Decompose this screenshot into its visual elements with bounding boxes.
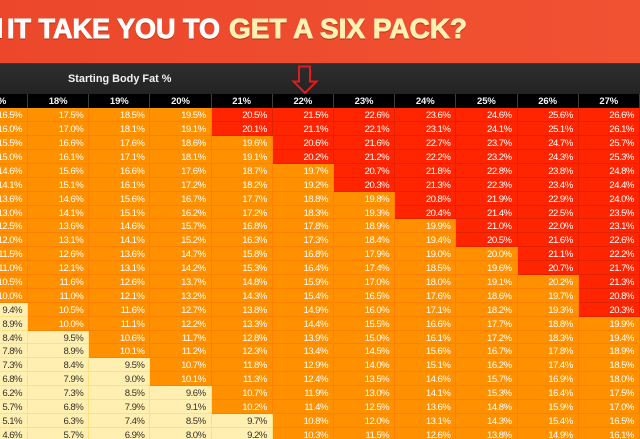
row 21: 6.2%	[2, 388, 22, 399]
row 23: 14.3%	[487, 416, 512, 427]
row 23: 12.0%	[365, 416, 389, 427]
row 8: 21.4%	[487, 208, 512, 219]
row 16: 13.3%	[242, 319, 267, 330]
row 1: 19.5%	[181, 110, 206, 121]
row 23: 9.7%	[247, 416, 267, 427]
row 20: 11.3%	[243, 374, 267, 385]
row 18: 7.8%	[2, 346, 22, 357]
row 4: 19.1%	[242, 152, 267, 163]
row 4: 18.1%	[181, 152, 206, 163]
row 14: 16.5%	[365, 291, 389, 302]
row 19: 10.7%	[181, 360, 206, 371]
row 13: 13.7%	[181, 277, 206, 288]
row 13: 11.6%	[59, 277, 83, 288]
row 2	[0, 122, 640, 136]
row 3: 21.6%	[365, 138, 389, 149]
row 22: 14.8%	[487, 402, 512, 413]
row 15: 19.3%	[548, 305, 573, 316]
row 19: 16.2%	[487, 360, 512, 371]
row 17: 18.3%	[548, 333, 573, 344]
row 7: 16.7%	[181, 194, 206, 205]
row 19: 14.0%	[365, 360, 389, 371]
row 14: 15.4%	[303, 291, 328, 302]
row 17: 9.5%	[64, 333, 83, 344]
row 12: 17.4%	[365, 263, 389, 274]
row 12: 12.1%	[59, 263, 83, 274]
row 1: 25.6%	[548, 110, 573, 121]
row 6: 22.3%	[487, 180, 512, 191]
row 20	[0, 372, 640, 386]
row 17: 12.8%	[242, 333, 267, 344]
row 21: 9.6%	[186, 388, 206, 399]
row 23	[0, 414, 640, 428]
row 10: 19.4%	[426, 235, 450, 246]
row 12: 20.7%	[548, 263, 573, 274]
row 6: 17.2%	[181, 180, 206, 191]
row 1: 26.6%	[609, 110, 634, 121]
row 11: 22.2%	[609, 249, 634, 260]
row 7: 18.8%	[303, 194, 328, 205]
title banner: IT TAKE YOU TO	[7, 13, 220, 44]
row 7: 15.6%	[120, 194, 144, 205]
row 11: 16.8%	[303, 249, 328, 260]
row 18: 14.5%	[365, 346, 389, 357]
row 14: 20.8%	[609, 291, 634, 302]
row 8: 18.3%	[303, 208, 328, 219]
row 6: 23.4%	[548, 180, 573, 191]
row 22: 13.6%	[426, 402, 450, 413]
dark axis band	[0, 63, 640, 94]
row 17: 15.0%	[365, 333, 389, 344]
title banner: GET A SIX PACK?	[229, 13, 467, 44]
row 9: 23.1%	[609, 221, 634, 232]
row 12: 14.2%	[181, 263, 206, 274]
row 8: 19.3%	[365, 208, 389, 219]
row 2: 17.0%	[59, 124, 83, 135]
row 12: 13.1%	[120, 263, 144, 274]
row 8: 14.1%	[59, 208, 83, 219]
row 5	[0, 164, 640, 178]
column headers: 19%	[110, 96, 129, 107]
row 23: 8.5%	[186, 416, 206, 427]
row 18: 11.2%	[182, 346, 206, 357]
row 21: 16.4%	[548, 388, 573, 399]
row 11: 15.8%	[242, 249, 267, 260]
row 18: 18.9%	[609, 346, 634, 357]
row 8	[0, 206, 640, 219]
row 22: 17.0%	[609, 402, 634, 413]
row 17: 16.1%	[426, 333, 450, 344]
row 7: 14.6%	[59, 194, 83, 205]
row 22	[0, 400, 640, 414]
row 12: 18.5%	[426, 263, 450, 274]
row 13: 12.6%	[120, 277, 144, 288]
title banner	[0, 0, 640, 63]
row 17	[0, 331, 640, 344]
row 2: 18.1%	[120, 124, 144, 135]
row 6: 18.2%	[242, 180, 267, 191]
row 20: 9.0%	[125, 374, 144, 385]
row 22: 7.9%	[125, 402, 144, 413]
row 13	[0, 275, 640, 289]
row 9: 17.8%	[303, 221, 328, 232]
row 19	[0, 358, 640, 372]
column headers: 21%	[232, 96, 251, 107]
row 21: 14.1%	[426, 388, 450, 399]
row 21	[0, 386, 640, 400]
row 8: 23.5%	[609, 208, 634, 219]
row 17: 11.7%	[182, 333, 206, 344]
row 13: 17.0%	[365, 277, 389, 288]
row 2: 26.1%	[609, 124, 634, 135]
row 19: 17.4%	[548, 360, 573, 371]
row 4: 16.1%	[59, 152, 83, 163]
row 7: 24.0%	[609, 194, 634, 205]
row 6: 15.1%	[59, 180, 83, 191]
row 7: 20.8%	[426, 194, 450, 205]
row 18: 16.7%	[487, 346, 512, 357]
row 12: 19.6%	[487, 263, 512, 274]
row 3: 22.7%	[426, 138, 450, 149]
row 1: 18.5%	[120, 110, 144, 121]
row 16: 16.6%	[426, 319, 450, 330]
row 20: 18.0%	[609, 374, 634, 385]
row 15: 20.3%	[609, 305, 634, 316]
row 10: 13.1%	[59, 235, 83, 246]
row 20: 13.5%	[365, 374, 389, 385]
row 13: 19.1%	[487, 277, 512, 288]
row 14: 17.6%	[426, 291, 450, 302]
column headers: 26%	[538, 96, 557, 107]
row 14: 13.2%	[181, 291, 206, 302]
row 1	[0, 108, 640, 122]
row 19: 12.9%	[303, 360, 328, 371]
row 5: 24.8%	[609, 166, 634, 177]
row 17: 8.4%	[2, 333, 22, 344]
row 4	[0, 150, 640, 164]
row 20: 15.7%	[487, 374, 512, 385]
row 21: 8.5%	[125, 388, 144, 399]
row 3: 23.7%	[487, 138, 512, 149]
row 12: 15.3%	[242, 263, 267, 274]
row 21: 17.5%	[609, 388, 634, 399]
row 1: 22.6%	[365, 110, 389, 121]
row 2: 21.1%	[303, 124, 328, 135]
row 8: 16.2%	[181, 208, 206, 219]
row 18: 8.9%	[64, 346, 83, 357]
row 16: 18.8%	[548, 319, 573, 330]
row 14: 12.1%	[120, 291, 144, 302]
row 9: 18.9%	[365, 221, 389, 232]
row 21: 15.3%	[487, 388, 512, 399]
row 11: 12.6%	[59, 249, 83, 260]
row 16: 10.0%	[59, 319, 83, 330]
row 4: 17.1%	[120, 152, 144, 163]
row 22: 6.8%	[64, 402, 83, 413]
row 22: 12.5%	[365, 402, 389, 413]
row 4: 20.2%	[303, 152, 328, 163]
row 15: 13.8%	[242, 305, 267, 316]
axis label: starting body fat: Starting Body Fat %	[68, 72, 171, 84]
row 19: 8.4%	[64, 360, 83, 371]
row 3	[0, 136, 640, 150]
row 4: 24.3%	[548, 152, 573, 163]
row 11: 21.1%	[548, 249, 573, 260]
row 15	[0, 303, 640, 317]
row 6: 20.3%	[365, 180, 389, 191]
row 20: 10.1%	[181, 374, 206, 385]
data table	[0, 108, 640, 439]
row 15: 12.7%	[181, 305, 206, 316]
row 7: 21.9%	[487, 194, 512, 205]
row 5: 23.8%	[548, 166, 573, 177]
row 16: 12.2%	[181, 319, 206, 330]
row 5: 21.8%	[426, 166, 450, 177]
row 13: 15.9%	[303, 277, 328, 288]
row 14: 18.6%	[487, 291, 512, 302]
row 1: 17.5%	[59, 110, 83, 121]
row 8: 22.5%	[548, 208, 573, 219]
row 13: 14.8%	[242, 277, 267, 288]
row 3: 18.6%	[181, 138, 206, 149]
column headers: 23%	[355, 96, 373, 107]
row 12	[0, 261, 640, 275]
row 14: 14.3%	[242, 291, 267, 302]
row 23: 10.8%	[303, 416, 328, 427]
row 12: 16.4%	[303, 263, 328, 274]
row 2: 24.1%	[487, 124, 512, 135]
row 23: 13.1%	[426, 416, 450, 427]
row 7: 17.7%	[242, 194, 267, 205]
row 24	[0, 428, 640, 439]
column headers: 18%	[49, 96, 67, 107]
row 3: 25.7%	[609, 138, 634, 149]
row 11: 17.9%	[365, 249, 389, 260]
row 23: 7.4%	[125, 416, 144, 427]
row 21: 11.9%	[304, 388, 328, 399]
row 14	[0, 289, 640, 303]
row 17: 10.6%	[120, 333, 144, 344]
row 22: 15.9%	[548, 402, 573, 413]
row 16	[0, 317, 640, 331]
row 6: 24.4%	[609, 180, 634, 191]
row 15: 9.4%	[2, 305, 22, 316]
row 5: 22.8%	[487, 166, 512, 177]
row 23: 5.1%	[2, 416, 22, 427]
row 10: 15.2%	[181, 235, 206, 246]
row 4: 21.2%	[365, 152, 389, 163]
row 5: 16.6%	[120, 166, 144, 177]
row 9: 14.6%	[120, 221, 144, 232]
row 10: 21.6%	[548, 235, 573, 246]
row 22: 10.2%	[242, 402, 267, 413]
row 10: 16.3%	[242, 235, 267, 246]
row 2: 19.1%	[181, 124, 206, 135]
row 9: 16.8%	[242, 221, 267, 232]
row 2: 20.1%	[242, 124, 267, 135]
row 10: 22.6%	[609, 235, 634, 246]
row 23: 6.3%	[64, 416, 83, 427]
row 3: 24.7%	[548, 138, 573, 149]
row 7: 19.8%	[365, 194, 389, 205]
row 13: 20.2%	[548, 277, 573, 288]
row 17: 17.2%	[487, 333, 512, 344]
row 13: 21.3%	[609, 277, 634, 288]
row 1: 24.6%	[487, 110, 512, 121]
row 18: 12.3%	[242, 346, 267, 357]
row 21: 13.0%	[365, 388, 389, 399]
row 9: 22.0%	[548, 221, 573, 232]
row 11: 14.7%	[181, 249, 206, 260]
row 3: 19.6%	[242, 138, 267, 149]
row 1: 23.6%	[426, 110, 450, 121]
row 15: 14.9%	[303, 305, 328, 316]
row 15: 10.5%	[59, 305, 83, 316]
row 6: 16.1%	[120, 180, 144, 191]
row 9: 21.0%	[487, 221, 512, 232]
row 16: 19.9%	[609, 319, 634, 330]
row 2: 22.1%	[365, 124, 389, 135]
row 3: 20.6%	[303, 138, 328, 149]
row 20: 14.6%	[426, 374, 450, 385]
row 18: 17.8%	[548, 346, 573, 357]
row 7: 22.9%	[548, 194, 573, 205]
row 11	[0, 247, 640, 261]
column headers: 24%	[416, 96, 435, 107]
row 5: 17.6%	[181, 166, 206, 177]
row 3: 16.6%	[59, 138, 83, 149]
row 10: 14.1%	[120, 235, 144, 246]
row 22: 9.1%	[186, 402, 206, 413]
column headers	[0, 94, 640, 108]
column headers: 25%	[477, 96, 496, 107]
row 21: 10.7%	[242, 388, 267, 399]
row 18: 13.4%	[303, 346, 328, 357]
row 2: 23.1%	[426, 124, 450, 135]
row 16: 11.1%	[121, 319, 144, 330]
row 9: 15.7%	[181, 221, 206, 232]
row 21: 7.3%	[64, 388, 83, 399]
row 10	[0, 233, 640, 247]
row 6: 21.3%	[426, 180, 450, 191]
row 6: 19.2%	[303, 180, 328, 191]
row 10: 18.4%	[365, 235, 389, 246]
row 13: 18.0%	[426, 277, 450, 288]
row 22: 11.4%	[304, 402, 328, 413]
row 16: 17.7%	[487, 319, 512, 330]
row 9: 13.6%	[59, 221, 83, 232]
row 17: 13.9%	[303, 333, 328, 344]
column headers: 22%	[293, 96, 312, 107]
row 9	[0, 219, 640, 233]
row 9: 19.9%	[426, 221, 450, 232]
row 20: 16.9%	[548, 374, 573, 385]
row 14: 19.7%	[548, 291, 573, 302]
row 10: 17.3%	[303, 235, 328, 246]
row 19: 11.8%	[243, 360, 267, 371]
row 23: 15.4%	[548, 416, 573, 427]
row 17: 19.4%	[609, 333, 634, 344]
row 20: 12.4%	[303, 374, 328, 385]
row 5: 19.7%	[303, 166, 328, 177]
row 12: 21.7%	[609, 263, 634, 274]
icon: red down arrow marking 22% column	[291, 66, 319, 94]
row 16: 8.9%	[2, 319, 22, 330]
row 11: 20.0%	[487, 249, 512, 260]
column headers: 20%	[171, 96, 190, 107]
row 11: 19.0%	[426, 249, 450, 260]
row 18	[0, 344, 640, 358]
row 15: 17.1%	[426, 305, 450, 316]
row 15: 11.6%	[121, 305, 144, 316]
row 6	[0, 178, 640, 192]
row 1: 21.5%	[303, 110, 328, 121]
row 4: 23.2%	[487, 152, 512, 163]
row 22: 5.7%	[2, 402, 22, 413]
column headers: 27%	[599, 96, 618, 107]
row 18: 10.1%	[120, 346, 144, 357]
row 19: 18.5%	[609, 360, 634, 371]
row 11: 13.6%	[120, 249, 144, 260]
row 7	[0, 192, 640, 206]
row 5: 18.7%	[242, 166, 267, 177]
row 2: 25.1%	[548, 124, 573, 135]
row 4: 25.3%	[609, 152, 634, 163]
row 19: 7.3%	[2, 360, 22, 371]
row 20: 6.8%	[2, 374, 22, 385]
row 19: 9.5%	[125, 360, 144, 371]
row 23: 16.5%	[609, 416, 634, 427]
row 15: 18.2%	[487, 305, 512, 316]
row 4: 22.2%	[426, 152, 450, 163]
row 8: 20.4%	[426, 208, 450, 219]
row 16: 15.5%	[365, 319, 389, 330]
row 8: 15.1%	[120, 208, 144, 219]
row 14: 11.0%	[59, 291, 83, 302]
row 5: 15.6%	[59, 166, 83, 177]
row 5: 20.7%	[365, 166, 389, 177]
row 20: 7.9%	[64, 374, 83, 385]
row 10: 20.5%	[487, 235, 512, 246]
row 8: 17.2%	[242, 208, 267, 219]
row 3: 17.6%	[120, 138, 144, 149]
row 15: 16.0%	[365, 305, 389, 316]
row 16: 14.4%	[303, 319, 328, 330]
row 1: 20.5%	[242, 110, 267, 121]
row 18: 15.6%	[426, 346, 450, 357]
row 19: 15.1%	[426, 360, 450, 371]
